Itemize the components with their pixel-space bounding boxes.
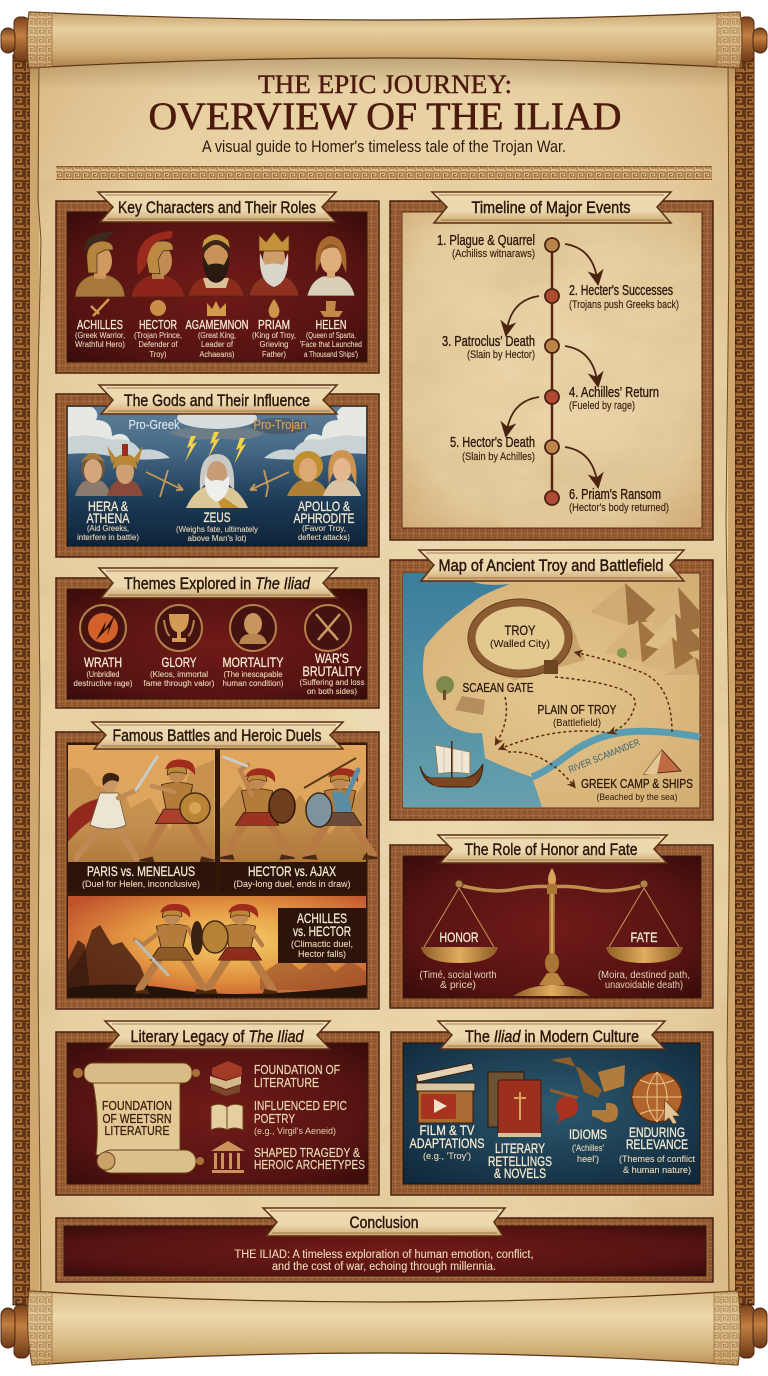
event labels right: 4. Achilles' Return [569, 385, 659, 401]
title: OVERVIEW OF THE ILIAD [148, 95, 622, 138]
caption: Achilles vs Hector: ACHILLES [297, 911, 347, 926]
honor and fate labels: FATE [630, 930, 658, 945]
modern culture labels: & NOVELS [494, 1166, 546, 1181]
caption: Hector vs Ajax: HECTOR vs. AJAX [248, 864, 336, 879]
god labels: above Man's lot) [188, 533, 247, 543]
panel: map [390, 550, 715, 820]
Troy walls: TROY [504, 622, 536, 638]
portrait: Hera [75, 453, 111, 496]
panel: honor and fate [390, 835, 713, 1008]
ribbon heading: gods: The Gods and Their Influence [124, 391, 310, 410]
ribbon heading: legacy [105, 1021, 330, 1049]
portrait: Zeus [186, 454, 248, 508]
Troy walls [468, 599, 585, 680]
mountains [590, 583, 700, 675]
caption: Paris vs Menelaus: (Duel for Helen, inconclusive) [82, 879, 200, 890]
honor and fate labels: (Timé, social worth [420, 969, 497, 981]
event labels right: (Trojans push Greeks back) [569, 299, 679, 311]
conclusion text: THE ILIAD: A timeless exploration of human emotion, conflict, [234, 1249, 534, 1261]
event labels right [569, 283, 679, 514]
character labels: Grieving [260, 339, 289, 349]
caption: Achilles vs Hector: Hector falls) [298, 949, 346, 960]
icon: temple [211, 1141, 245, 1173]
god labels: (Weighs fate, ultimately [176, 524, 259, 534]
legacy list [254, 1062, 365, 1172]
title: THE EPIC JOURNEY: [258, 70, 512, 99]
icon: Greek ship [420, 741, 483, 787]
modern culture labels: ADAPTATIONS [410, 1136, 484, 1151]
clouds [68, 407, 366, 460]
sea [403, 573, 542, 807]
icon: crown [207, 301, 226, 316]
ribbon heading: timeline [432, 192, 671, 223]
theme labels: WRATH [84, 655, 122, 670]
icon: parchment scroll: LITERATURE [104, 1124, 170, 1138]
event labels right: 6. Priam's Ransom [569, 487, 661, 503]
title [148, 70, 622, 156]
character labels: Troy) [150, 349, 167, 359]
modern culture labels: (Themes of conflict [619, 1154, 695, 1165]
panel: timeline [390, 192, 713, 540]
modern culture labels: & human nature) [623, 1165, 691, 1176]
portrait: Agamemnon [188, 234, 244, 296]
panel: conclusion [56, 1208, 713, 1282]
modern culture labels: RETELLINGS [488, 1154, 552, 1169]
river Scamander [532, 731, 700, 777]
map labels: (Battlefield) [553, 718, 601, 729]
theme labels: GLORY [162, 655, 196, 670]
character labels: (Queen of Sparta, [306, 330, 356, 340]
character labels: Leader of [201, 339, 234, 349]
timeline spine [551, 245, 553, 498]
character labels: ACHILLES [77, 317, 123, 332]
god labels: interfere in battle) [77, 532, 139, 542]
panel: key characters [56, 192, 379, 373]
god labels: deflect attacks) [298, 532, 350, 542]
icon: ship [320, 301, 343, 317]
panel: battles [56, 722, 379, 1009]
modern culture labels: FILM & TV [420, 1123, 474, 1138]
honor and fate labels: & price) [440, 979, 476, 991]
event labels right: 2. Hecter's Successes [569, 283, 673, 299]
portrait: Hector [131, 231, 185, 297]
icon: books [488, 1072, 541, 1137]
portrait: Athena [107, 444, 143, 496]
character labels: HELEN [316, 317, 346, 332]
panel: gods [56, 385, 379, 557]
icon: film clapper [416, 1063, 475, 1123]
balance scale [421, 868, 683, 996]
event labels left: 1. Plague & Quarrel [437, 233, 535, 249]
portrait: Aphrodite [323, 450, 361, 496]
character labels: (King of Troy, [252, 330, 296, 340]
icon: parchment scroll [73, 1063, 204, 1173]
ribbon heading: map: Map of Ancient Troy and Battlefield [438, 556, 664, 575]
icon: open book [211, 1104, 243, 1130]
portrait: Helen [307, 236, 355, 296]
theme labels: (Kleos, immortal [150, 669, 208, 679]
label: pro-Greek: Pro-Greek [128, 418, 180, 432]
event labels left: 5. Hector's Death [450, 435, 535, 451]
icon: parchment scroll: FOUNDATION [102, 1099, 172, 1113]
timeline nodes [545, 238, 559, 505]
character labels: 'Face that Launched [300, 339, 362, 349]
legacy list: (e.g., Virgil's Aeneid) [254, 1126, 336, 1137]
icon: crossed swords [305, 605, 351, 651]
theme labels: (Unbridled [86, 669, 120, 679]
character labels: HECTOR [139, 317, 177, 332]
dashed routes [497, 653, 672, 785]
god labels [77, 498, 354, 543]
modern culture labels: LITERARY [495, 1141, 545, 1156]
legacy list: FOUNDATION OF [254, 1062, 340, 1077]
event labels left: (Slain by Hector) [467, 349, 535, 361]
ribbon heading: themes: Themes Explored in The Iliad [124, 574, 310, 593]
god labels: ZEUS [204, 509, 230, 525]
ribbon heading: modern: The Iliad in Modern Culture [465, 1027, 639, 1046]
character labels: (Trojan Prince, [134, 330, 182, 340]
scene: Paris vs Menelaus [68, 745, 215, 862]
event labels right: (Fueled by rage) [569, 400, 635, 412]
icon: sword [91, 299, 109, 316]
theme labels: BRUTALITY [302, 664, 362, 679]
caption: Achilles vs Hector: (Climactic duel, [291, 939, 353, 950]
god labels: HERA & [88, 498, 129, 514]
event labels left: (Achiliss witnaraws) [452, 248, 535, 260]
god labels: (Aid Greeks, [87, 523, 129, 533]
event labels right: (Hector's body returned) [569, 502, 669, 514]
character labels: PRIAM [258, 317, 290, 332]
ribbon heading: battles: Famous Battles and Heroic Duels [112, 726, 322, 745]
panel: themes [56, 568, 379, 708]
character labels [75, 317, 362, 359]
map labels [462, 681, 693, 803]
portrait: Priam [249, 232, 299, 296]
portrait: Apollo [287, 451, 329, 496]
scene: Hector vs Ajax [220, 745, 377, 862]
ribbon heading: map [419, 550, 684, 581]
character labels: AGAMEMNON [186, 317, 248, 332]
character labels: Achaeans) [200, 349, 235, 359]
icon: idioms, heel and speech bubbles [550, 1057, 625, 1123]
caption: Hector vs Ajax: (Day-long duel, ends in draw) [234, 879, 350, 890]
character labels: (Greek Warrior, [75, 330, 125, 340]
icon: wrath flame [80, 605, 126, 651]
icon: oil drop [269, 299, 279, 318]
portrait: Achilles [75, 232, 125, 297]
caption: Achilles vs Hector: vs. HECTOR [293, 924, 351, 939]
title: A visual guide to Homer's timeless tale of the Trojan War. [202, 137, 566, 156]
theme labels: WAR'S [315, 651, 349, 666]
honor and fate labels: (Moira, destined path, [598, 969, 690, 981]
ribbon heading: gods [99, 385, 337, 414]
legacy list: HEROIC ARCHETYPES [254, 1157, 365, 1172]
icon: tent [644, 750, 681, 774]
Troy walls: (Walled City) [490, 638, 550, 650]
map labels: (Beached by the sea) [596, 792, 678, 803]
ribbon heading: themes [99, 568, 337, 598]
character labels: (Great King, [198, 330, 236, 340]
arrows toward Zeus [146, 470, 289, 497]
god labels: APOLLO & [298, 498, 350, 514]
top scroll roller [1, 12, 767, 68]
event labels left [437, 233, 535, 463]
caption: Paris vs Menelaus: PARIS vs. MENELAUS [87, 864, 195, 879]
map labels: SCAEAN GATE [462, 681, 534, 695]
panel: modern culture [391, 1021, 713, 1195]
ribbon heading: battles [92, 722, 343, 749]
modern culture labels: (e.g., 'Troy') [423, 1151, 471, 1162]
scene: Achilles vs Hector [68, 896, 366, 997]
theme labels: MORTALITY [222, 655, 284, 670]
character labels: a Thousand Ships') [304, 349, 358, 359]
icon: mortality head [230, 605, 276, 651]
ribbon heading: timeline: Timeline of Major Events [472, 198, 630, 217]
modern culture labels: heel') [577, 1154, 599, 1165]
theme labels: on both sides) [307, 686, 357, 696]
ribbon heading: honor: The Role of Honor and Fate [464, 840, 638, 859]
legacy list: POETRY [254, 1111, 295, 1126]
conclusion text [234, 1249, 534, 1273]
icon: globe and cursor [632, 1072, 682, 1124]
ribbon heading: legacy: Literary Legacy of The Iliad [130, 1027, 304, 1046]
caption: Hector vs Ajax [220, 862, 366, 892]
icon: parchment scroll: OF WEETSRN [102, 1112, 172, 1126]
theme labels: fame through valor) [144, 678, 215, 688]
character labels: Father) [262, 349, 286, 359]
event labels left: 3. Patroclus' Death [442, 334, 535, 350]
honor and fate labels: unavoidable death) [605, 979, 683, 991]
header divider: Greek key band [56, 166, 712, 180]
icon: lightning [185, 432, 246, 464]
caption: Paris vs Menelaus [68, 862, 215, 892]
god labels: APHRODITE [294, 510, 354, 526]
honor and fate labels: HONOR [440, 930, 479, 945]
modern culture labels [410, 1123, 695, 1181]
theme labels: (Suffering and loss [300, 677, 364, 687]
map labels: RIVER SCAMANDER [567, 737, 642, 776]
icon: round shield [150, 300, 166, 316]
ribbon heading: conclusion: Conclusion [350, 1213, 418, 1232]
conclusion text: and the cost of war, echoing through millennia. [272, 1261, 496, 1273]
god labels: ATHENA [86, 510, 130, 526]
icon: glory trophy [156, 605, 202, 651]
modern culture labels: IDIOMS [569, 1127, 607, 1142]
god labels: (Favor Troy, [302, 523, 346, 533]
legacy list: INFLUENCED EPIC [254, 1098, 347, 1113]
map labels: GREEK CAMP & SHIPS [581, 777, 693, 791]
icon: trees [436, 648, 627, 715]
ribbon heading: key characters: Key Characters and Their Roles [118, 198, 316, 217]
label: pro-Trojan: Pro-Trojan [254, 418, 307, 432]
ribbon heading: key characters [98, 192, 336, 222]
panel: literary legacy [56, 1021, 379, 1195]
ribbon heading: honor [438, 835, 667, 863]
icon: stack of books [210, 1061, 242, 1096]
ribbon heading: modern [438, 1021, 665, 1049]
map labels: PLAIN OF TROY [538, 703, 617, 717]
character labels: Wrathful Hero) [75, 339, 125, 349]
theme labels [74, 651, 364, 696]
bottom scroll roller [1, 1291, 767, 1365]
caption: Achilles vs Hector [278, 908, 366, 963]
timeline arrows [507, 244, 597, 481]
modern culture labels: ENDURING [629, 1125, 685, 1140]
legacy list: SHAPED TRAGEDY & [254, 1145, 360, 1160]
theme labels: human condition) [222, 678, 284, 688]
modern culture labels: RELEVANCE [626, 1137, 688, 1152]
character labels: Defender of [138, 339, 178, 349]
theme labels: (The inescapable [224, 669, 283, 679]
legacy list: LITERATURE [254, 1075, 319, 1090]
honor and fate labels [420, 930, 690, 991]
event labels left: (Slain by Achilles) [462, 451, 535, 463]
ribbon heading: conclusion [263, 1208, 505, 1236]
modern culture labels: ('Achilles' [572, 1143, 604, 1154]
theme labels: destructive rage) [74, 678, 133, 688]
